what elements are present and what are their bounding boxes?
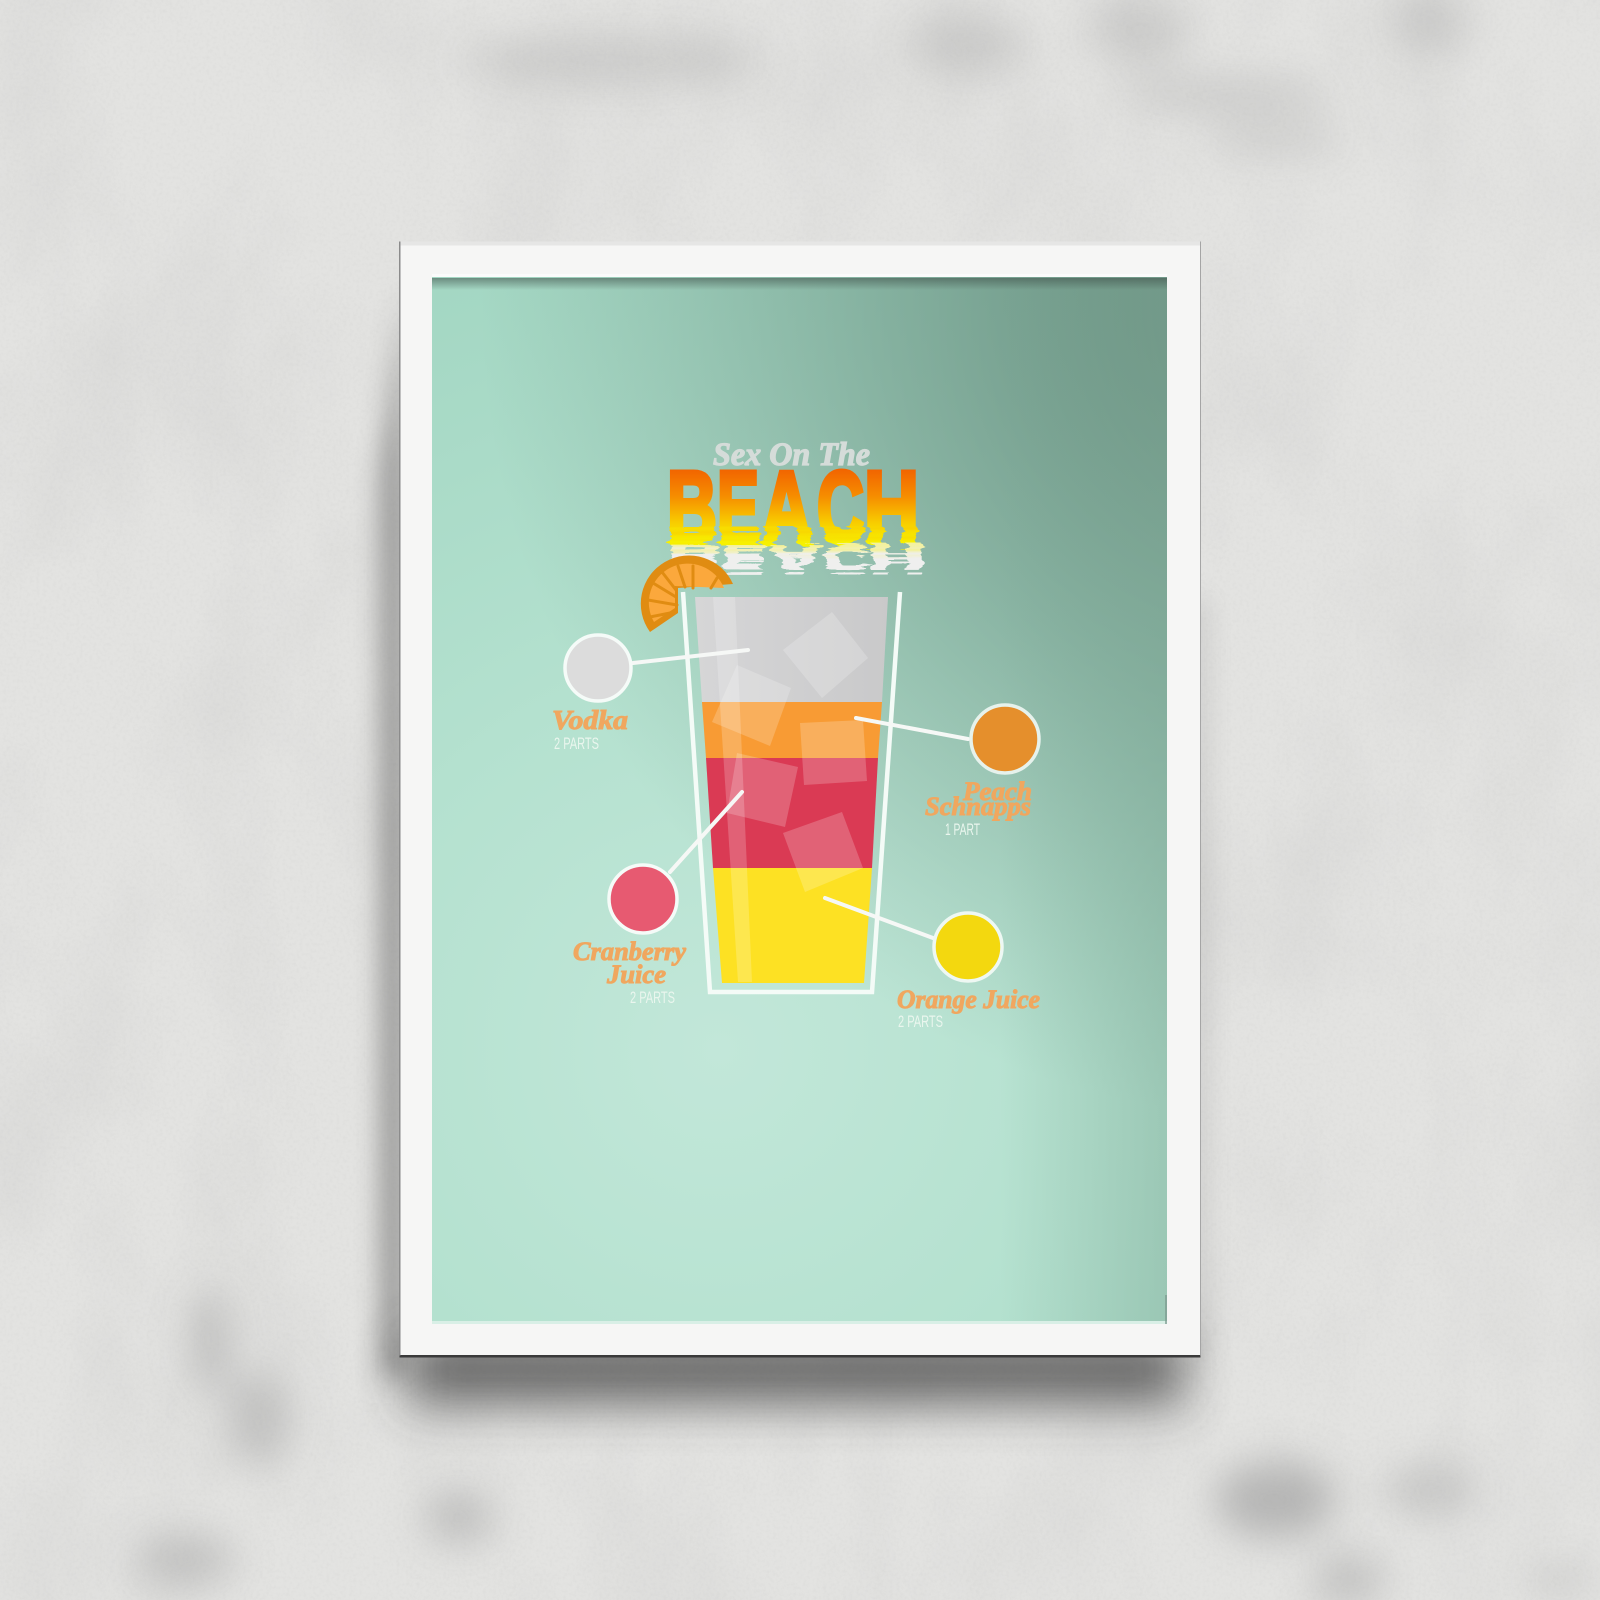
quantity: 2 PARTS bbox=[554, 734, 599, 753]
glass with layered drink bbox=[683, 592, 900, 992]
reflection: A bbox=[768, 537, 820, 576]
icon: orange slice bbox=[641, 555, 733, 632]
reflection: H bbox=[868, 537, 924, 576]
glass outline bbox=[683, 592, 900, 992]
connector bbox=[670, 792, 742, 872]
letters rippled base: H bbox=[864, 450, 919, 565]
letters rippled base: C bbox=[817, 450, 864, 565]
letters upper: E bbox=[717, 450, 759, 565]
reflection bbox=[668, 537, 924, 576]
ingredient: cranberry juice bbox=[573, 792, 742, 1007]
connector bbox=[633, 650, 748, 663]
letters rippled base: E bbox=[717, 450, 759, 565]
reflection: B bbox=[668, 537, 720, 576]
layer: orange juice bbox=[713, 868, 872, 983]
letters rippled base bbox=[666, 526, 920, 550]
connector bbox=[856, 718, 968, 739]
name: Cranberry bbox=[573, 937, 686, 966]
title: Sex On The: Sex On The bbox=[713, 437, 870, 473]
ingredient: peach schnapps: Schnapps bbox=[925, 792, 1031, 821]
letters upper: A bbox=[761, 450, 812, 565]
letters upper: B bbox=[667, 450, 717, 565]
letters rippled base: A bbox=[761, 450, 812, 565]
reflection: C bbox=[822, 537, 870, 576]
ingredient: vodka bbox=[552, 635, 748, 753]
reflection: E bbox=[722, 537, 764, 576]
quantity: 2 PARTS bbox=[898, 1012, 943, 1031]
letters rippled base: B bbox=[667, 450, 717, 565]
ingredient: peach schnapps bbox=[856, 705, 1039, 839]
name: Orange Juice bbox=[897, 985, 1040, 1014]
ice cubes bbox=[712, 612, 868, 892]
ingredient: cranberry juice: Juice bbox=[606, 960, 666, 989]
poster panel bbox=[432, 274, 1167, 1324]
frame shadow bbox=[382, 290, 1206, 1403]
glass highlight bbox=[713, 597, 752, 982]
connector bbox=[825, 898, 933, 938]
swatch bbox=[934, 913, 1002, 981]
name: Vodka bbox=[552, 705, 628, 735]
swatch bbox=[971, 705, 1039, 773]
layer: cranberry juice bbox=[706, 758, 878, 868]
layer: vodka bbox=[695, 597, 888, 702]
layer: peach schnapps bbox=[702, 702, 882, 758]
letters upper: C bbox=[817, 450, 864, 565]
swatch bbox=[609, 865, 677, 933]
letters upper: H bbox=[864, 450, 919, 565]
ingredient: orange juice bbox=[825, 898, 1040, 1031]
quantity: 1 PART bbox=[945, 820, 980, 839]
name: Peach bbox=[962, 777, 1032, 806]
letters upper bbox=[670, 468, 916, 526]
title: BEACH with water reflection bbox=[666, 468, 926, 575]
quantity: 2 PARTS bbox=[630, 988, 675, 1007]
swatch bbox=[565, 635, 631, 701]
white frame bbox=[399, 242, 1201, 1358]
